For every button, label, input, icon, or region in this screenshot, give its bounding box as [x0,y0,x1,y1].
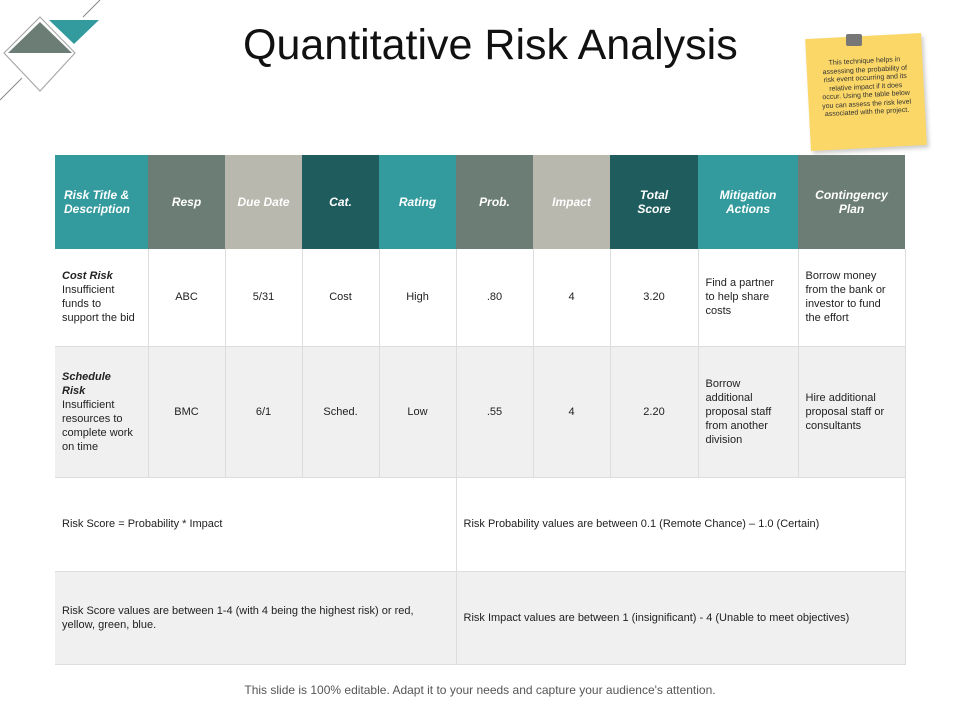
risk table: Risk Probability values are between 0.1 (Remote Chance) – 1.0 (Certain) [464,518,819,530]
risk table: Low [407,406,428,418]
risk table: 5/31 [253,291,274,303]
risk table: Mitigation Actions [720,188,776,216]
risk table: .55 [487,406,502,418]
risk table: Risk Title & Description [64,188,130,216]
risk table: BMC [174,406,199,418]
logo [0,0,100,100]
risk table: Risk Impact values are between 1 (insignificant) - 4 (Unable to meet objectives) [464,612,849,624]
risk table: ABC [175,291,198,303]
icon: binder clip [846,34,862,46]
risk table: Total Score [637,188,671,216]
risk table: Borrow additional proposal staff from another division [706,378,771,446]
risk table: 6/1 [256,406,271,418]
risk table: Contingency Plan [815,188,888,216]
risk table: Risk Score = Probability * Impact [62,518,222,530]
risk table: Find a partner to help share costs [706,277,774,317]
risk table: Schedule Risk [62,370,111,396]
sticky note [805,33,927,151]
risk table: Hire additional proposal staff or consultants [806,392,884,432]
risk table: Resp [172,195,201,209]
risk table: Prob. [479,195,510,209]
sticky note: This technique helps in assessing the probability of risk event occurring and its relative impact if it does occur. Using the table below you can assess the risk level associated with the project. [822,56,911,118]
risk table: .80 [487,291,502,303]
risk table: Impact [552,195,591,209]
risk table: Sched. [323,406,358,418]
risk table: High [406,291,429,303]
risk table: 3.20 [643,291,665,303]
risk table: 4 [568,406,575,418]
risk table: 2.20 [643,406,665,418]
risk table: Cost Risk [62,270,113,282]
risk table: Cost [329,291,352,303]
title: Quantitative Risk Analysis [243,21,738,69]
risk table [55,155,906,665]
risk table: Cat. [329,195,352,209]
risk table: Rating [399,195,436,209]
risk table: 4 [568,291,575,303]
risk table: Risk Score values are between 1-4 (with 4 being the highest risk) or red, yellow, green, blue. [62,604,414,630]
risk table: Due Date [237,195,290,209]
risk table: Borrow money from the bank or investor to fund the effort [806,270,886,324]
footer: This slide is 100% editable. Adapt it to your needs and capture your audience's attention. [244,683,716,697]
risk table: Insufficient resources to complete work on time [62,398,133,452]
risk table: Insufficient funds to support the bid [62,284,135,324]
